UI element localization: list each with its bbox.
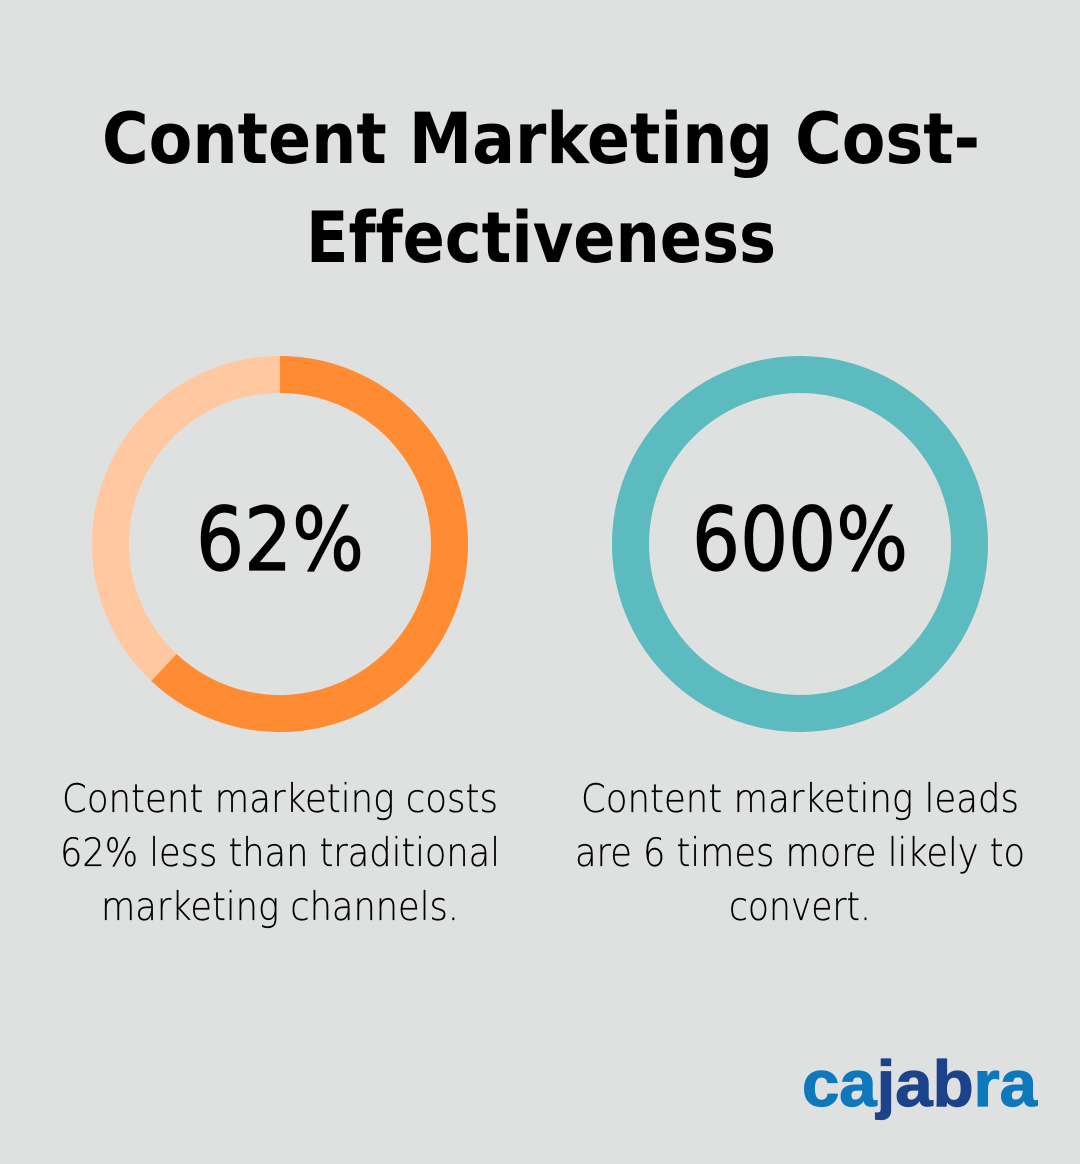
donut chart: 62% <box>110 374 450 714</box>
panel: 62% statistic <box>60 374 500 930</box>
value: 600%: 600% <box>692 489 908 591</box>
value: 62%: 62% <box>196 489 364 591</box>
description: 600%: convert. <box>729 885 871 930</box>
title <box>102 98 980 279</box>
description: 600%: are 6 times more likely to <box>575 831 1025 876</box>
panel: 600% statistic <box>575 374 1025 930</box>
description: 62%: marketing channels. <box>101 885 459 930</box>
description: 62%: 62% less than traditional <box>60 831 500 876</box>
donut chart: 600% <box>630 374 970 714</box>
description: 62%: Content marketing costs <box>62 777 498 822</box>
logo: cajabra: cajabra <box>802 1047 1038 1120</box>
description: 600% <box>575 777 1025 930</box>
title: Content Marketing Cost- <box>102 98 980 180</box>
description: 600%: Content marketing leads <box>581 777 1019 822</box>
description: 62% <box>60 777 500 930</box>
title: Effectiveness <box>306 197 776 279</box>
